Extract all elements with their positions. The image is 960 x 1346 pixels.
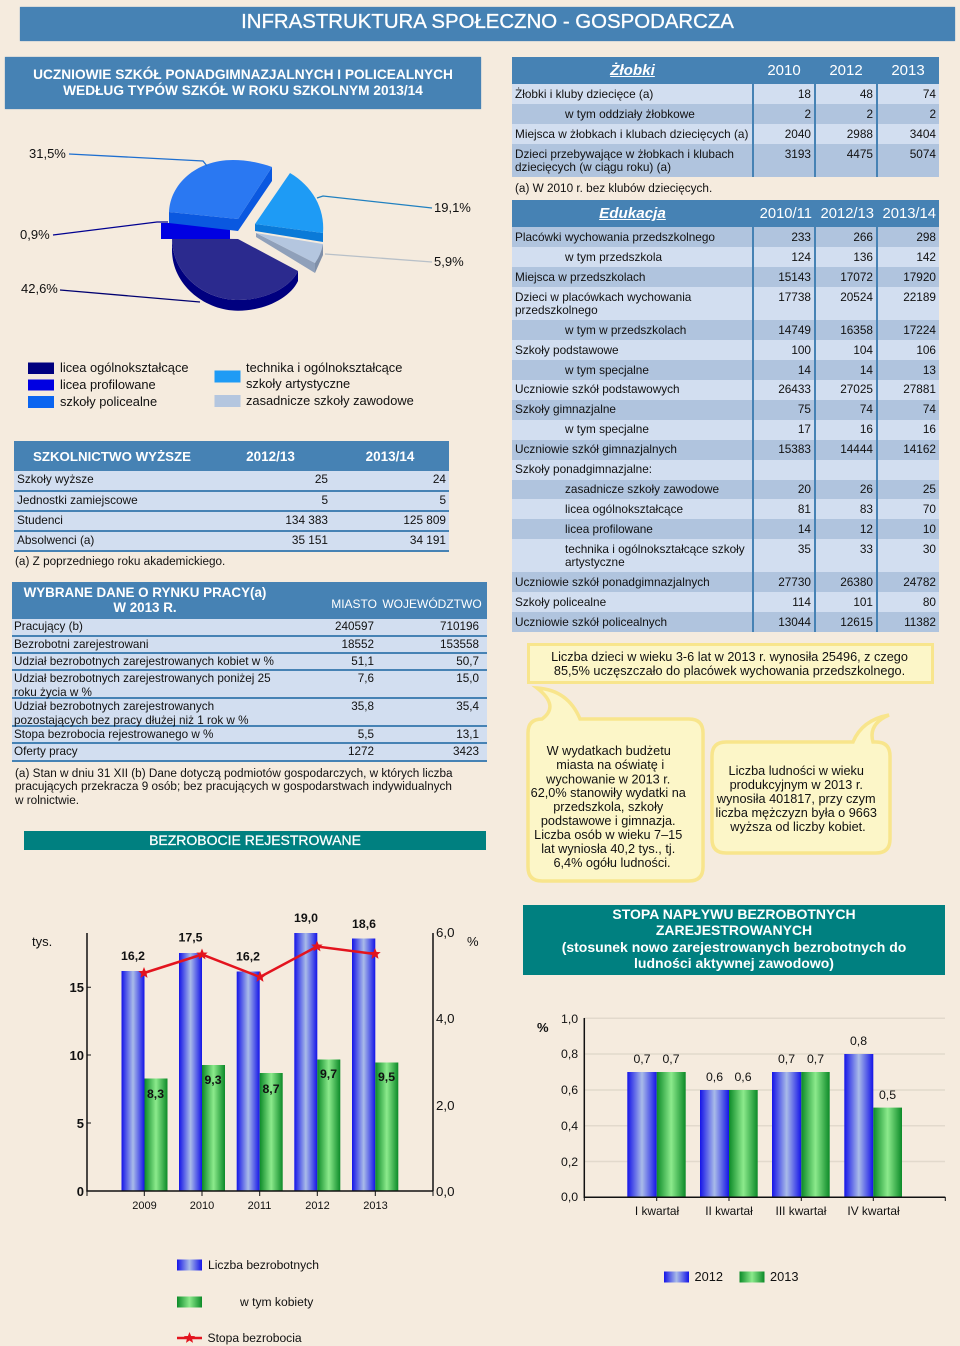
data labels: 17,5 (179, 930, 203, 944)
table: edukacja: 14749 (778, 322, 811, 336)
table: żłobki: 3404 (910, 126, 936, 140)
table: rynek pracy: 3423 (453, 745, 479, 758)
callout: liczba ludności (710, 713, 892, 855)
table: edukacja: 104 (853, 342, 873, 356)
left axis labels: 0 (77, 1184, 84, 1199)
table: szkolnictwo wyższe: Absolwenci (a) (17, 533, 94, 547)
data labels: 9,7 (320, 1067, 337, 1081)
category labels: II kwartał (705, 1204, 753, 1218)
table: żłobki: 5074 (910, 146, 936, 160)
data labels: 0,6 (706, 1070, 723, 1084)
table: edukacja: zasadnicze szkoły zawodowe (565, 482, 719, 496)
data labels: 9,3 (204, 1073, 222, 1087)
title banner: INFRASTRUKTURA SPOŁECZNO - GOSPODARCZA (241, 11, 734, 33)
table: edukacja: 10 (923, 522, 936, 536)
heading: stopa napływu bezrobotnych: ludności aktywnej zawodowo) (634, 955, 834, 971)
table: edukacja: 2012/13 (820, 206, 874, 222)
table: rynek pracy: 7,6 (358, 672, 374, 685)
callout text: wydatki budżetu: 62,0% stanowiły wydatki na (531, 786, 687, 800)
bar chart: stopa napływu bezrobotnych (537, 1012, 946, 1284)
table: edukacja: w tym specjalne (565, 362, 649, 376)
table: żłobki: Żłobki i kluby dziecięce (a) (515, 86, 653, 100)
pie value labels: 5,9% (434, 254, 464, 269)
bars: w tym kobiety (144, 1060, 398, 1191)
table: edukacja: 17920 (903, 270, 936, 284)
table: szkolnictwo wyższe: SZKOLNICTWO WYŻSZE (33, 448, 191, 464)
heading: students by school type (5, 57, 481, 109)
callout text: wydatki budżetu: W wydatkach budżetu (547, 744, 671, 758)
table: edukacja: 22189 (903, 290, 936, 304)
pie value labels: 19,1% (434, 200, 471, 215)
table: rynek pracy: 18552 (341, 638, 374, 651)
legend: bezrobocie: Liczba bezrobotnych (208, 1258, 319, 1272)
table: szkolnictwo wyższe: 125 809 (403, 513, 446, 527)
note: rynek pracy (15, 767, 453, 807)
year labels (132, 1200, 388, 1212)
table: rynek pracy: 710196 (440, 620, 479, 633)
table: rynek pracy: 13,1 (456, 728, 479, 741)
line: stopa bezrobocia (138, 940, 381, 982)
table: edukacja: 17738 (778, 290, 811, 304)
table: edukacja: Szkoły policealne (515, 595, 606, 609)
table: rynek pracy (12, 582, 487, 762)
table: edukacja: technika i ogólnokształcące szkoły artystyczne (565, 542, 745, 569)
table: żłobki: 2040 (785, 126, 811, 140)
y axis labels (561, 1012, 578, 1204)
callout text: wydatki budżetu: podstawowe i gimnazja. (541, 814, 676, 828)
table: edukacja: 16358 (840, 322, 873, 336)
table: edukacja: 27025 (840, 382, 873, 396)
y axis unit: % (537, 1020, 549, 1035)
slice: technika i ogólnokształcące szkoły artystyczne 19,1% (255, 173, 323, 242)
table: edukacja: 12615 (840, 615, 873, 629)
callout text: wydatki budżetu: przedszkola, szkoły (553, 800, 664, 814)
slice: szkoły policealne 31,5% (169, 160, 272, 231)
heading: stopa napływu bezrobotnych (523, 905, 945, 975)
data labels: 0,6 (734, 1070, 752, 1084)
data labels: 0,7 (633, 1052, 651, 1066)
data labels: 19,0 (294, 911, 318, 925)
table: edukacja: 74 (860, 402, 873, 416)
table: edukacja: Uczniowie szkół ponadgimnazjalnych (515, 575, 710, 589)
callout text: wydatki budżetu: lat wyniosła 40,2 tys., tj. (541, 842, 675, 856)
table: szkolnictwo wyższe: Szkoły wyższe (17, 472, 94, 486)
table: edukacja: licea ogólnokształcące (565, 502, 683, 516)
table: rynek pracy: roku życia w % (14, 686, 92, 699)
table: edukacja: 2013/14 (882, 206, 936, 222)
table: edukacja: Uczniowie szkół podstawowych (515, 382, 680, 396)
data labels: 9,5 (378, 1070, 395, 1084)
heading: stopa napływu bezrobotnych: (stosunek nowo zarejestrowanych bezrobotnych do (562, 939, 906, 955)
table: żłobki: 2010 (767, 62, 801, 79)
table: edukacja: 16 (860, 422, 873, 436)
year labels: 2009 (132, 1200, 157, 1212)
table: edukacja: 114 (792, 595, 811, 609)
left axis labels: 10 (70, 1048, 84, 1063)
table: edukacja: 17072 (840, 270, 873, 284)
table: edukacja: 14 (860, 362, 873, 376)
heading: students by school type: WEDŁUG TYPÓW SZKÓŁ W ROKU SZKOLNYM 2013/14 (63, 83, 423, 98)
table: edukacja: 11382 (904, 615, 936, 629)
right axis labels: 2,0 (436, 1098, 454, 1113)
legend: kwartały: 2012 (694, 1269, 723, 1284)
y axis labels: 0,2 (561, 1155, 578, 1169)
table: żłobki: 2 (804, 106, 811, 120)
table: szkolnictwo wyższe: 25 (315, 472, 328, 486)
table: szkolnictwo wyższe: 35 151 (292, 533, 328, 547)
table: edukacja: 81 (798, 502, 811, 516)
table: rynek pracy: 5,5 (358, 728, 374, 741)
table: rynek pracy: Pracujący (b) (14, 620, 83, 633)
data labels: 8,7 (262, 1082, 280, 1096)
table: żłobki: 2013 (891, 62, 925, 79)
table: edukacja: 142 (916, 250, 936, 264)
table: rynek pracy: 51,1 (351, 655, 374, 668)
heading: stopa napływu bezrobotnych: ZAREJESTROWANYCH (656, 922, 812, 938)
table: edukacja: 17 (798, 422, 811, 436)
category labels (635, 1204, 900, 1218)
table: edukacja: 80 (923, 595, 936, 609)
callout text: liczba ludności: produkcyjnym w 2013 r. (730, 778, 863, 792)
data labels: 0,8 (850, 1034, 867, 1048)
callout text: liczba ludności: Liczba ludności w wieku (729, 764, 864, 778)
year labels: 2013 (363, 1200, 388, 1212)
table: szkolnictwo wyższe: 2013/14 (366, 448, 414, 464)
table: rynek pracy: Oferty pracy (14, 745, 78, 758)
year labels: 2012 (305, 1200, 330, 1212)
table: żłobki (512, 57, 939, 177)
table: rynek pracy: 15,0 (456, 672, 479, 685)
category labels: I kwartał (635, 1204, 679, 1218)
table: rynek pracy: Stopa bezrobocia rejestrowanego w % (14, 728, 213, 741)
pie value labels: 31,5% (29, 146, 66, 161)
pie legend: technika i ogólnokształcące (246, 360, 402, 375)
axis unit labels: tys. (32, 934, 52, 949)
table: edukacja: 33 (860, 542, 873, 556)
y axis labels: 0,4 (561, 1119, 578, 1133)
table: edukacja: Szkoły gimnazjalne (515, 402, 616, 416)
table: rynek pracy: Bezrobotni zarejestrowani (14, 638, 148, 651)
y axis labels: 0,8 (561, 1047, 578, 1061)
legend: bezrobocie (177, 1258, 319, 1345)
left axis labels: 15 (70, 980, 84, 995)
slice: zasadnicze szkoły zawodowe 5,9% (256, 233, 323, 273)
note: szkolnictwo wyższe: (a) Z poprzedniego roku akademickiego. (15, 555, 225, 568)
right axis labels (436, 925, 454, 1199)
table: edukacja: Dzieci w placówkach wychowania przedszkolnego (515, 290, 691, 317)
table: edukacja: 17224 (903, 322, 936, 336)
table: edukacja: 266 (853, 230, 873, 244)
table: edukacja: Uczniowie szkół policealnych (515, 615, 667, 629)
table: edukacja: 100 (791, 342, 811, 356)
axes (87, 933, 433, 1196)
table: żłobki: w tym oddziały żłobkowe (565, 106, 695, 120)
y axis labels: 0,0 (561, 1190, 578, 1204)
pie legend: licea ogólnokształcące (60, 360, 189, 375)
table: edukacja: Edukacja (599, 205, 666, 222)
table: żłobki: 4475 (847, 146, 873, 160)
table: żłobki: 3193 (785, 146, 811, 160)
legend: kwartały (664, 1269, 798, 1284)
table: rynek pracy: pozostających bez pracy dłużej niż 1 rok w % (14, 714, 249, 727)
heading: bezrobocie rejestrowane (24, 831, 486, 850)
table: edukacja: 136 (853, 250, 873, 264)
pie legend: zasadnicze szkoły zawodowe (246, 393, 414, 408)
bars: liczba bezrobotnych (122, 933, 375, 1191)
pie value labels: 42,6% (21, 281, 58, 296)
y axis labels: 1,0 (561, 1012, 578, 1026)
table: edukacja: 12 (860, 522, 873, 536)
table: szkolnictwo wyższe: 34 191 (410, 533, 446, 547)
data labels: 16,2 (121, 949, 145, 963)
table: edukacja: w tym specjalne (565, 422, 649, 436)
pie legend: licea profilowane (60, 377, 156, 392)
legend: bezrobocie: Stopa bezrobocia (208, 1331, 302, 1345)
callout: liczba dzieci (527, 643, 934, 684)
table: żłobki: 2 (866, 106, 873, 120)
table: edukacja: 16 (923, 422, 936, 436)
table: rynek pracy: 35,8 (351, 700, 374, 713)
table: rynek pracy: Udział bezrobotnych zarejestrowanych poniżej 25 (14, 672, 271, 685)
table: szkolnictwo wyższe: Studenci (17, 513, 63, 527)
pie chart: students by school type (20, 146, 471, 409)
table: rynek pracy: 1272 (348, 745, 374, 758)
callout text: wydatki budżetu: miasta na oświatę i (556, 758, 664, 772)
table: edukacja (512, 200, 939, 632)
data labels: 8,3 (147, 1087, 164, 1101)
table: edukacja: 15383 (778, 442, 811, 456)
left axis labels: 5 (77, 1116, 84, 1131)
category labels: IV kwartał (847, 1204, 900, 1218)
title banner (20, 7, 955, 41)
callout text: wydatki budżetu: wychowanie w 2013 r. (545, 772, 670, 786)
table: szkolnictwo wyższe: 5 (439, 493, 446, 507)
table: żłobki: 2 (929, 106, 936, 120)
pie legend: szkoły artystyczne (246, 376, 350, 391)
table: szkolnictwo wyższe: Jednostki zamiejscowe (17, 493, 138, 507)
heading: stopa napływu bezrobotnych: STOPA NAPŁYWU BEZROBOTNYCH (612, 906, 856, 922)
table: szkolnictwo wyższe: 24 (433, 472, 446, 486)
data labels: 0,5 (879, 1088, 896, 1102)
callout text: liczba ludności: wyższa od liczby kobiet. (729, 820, 866, 834)
callout text: liczba ludności: wynosiła 401817, przy czym (716, 792, 876, 806)
table: szkolnictwo wyższe: 134 383 (285, 513, 328, 527)
table: edukacja: 35 (798, 542, 811, 556)
data labels: 0,7 (778, 1052, 795, 1066)
table: edukacja: 25 (923, 482, 936, 496)
heading: bezrobocie rejestrowane: BEZROBOCIE REJESTROWANE (149, 832, 361, 848)
table: edukacja: 13 (923, 362, 936, 376)
table: edukacja: 124 (791, 250, 811, 264)
legend: kwartały: 2013 (770, 1269, 798, 1284)
table: edukacja: 26433 (778, 382, 811, 396)
table: rynek pracy: WOJEWÓDZTWO (382, 596, 482, 610)
table: edukacja: 20524 (840, 290, 873, 304)
note: rynek pracy: (a) Stan w dniu 31 XII (b) Dane dotyczą podmiotów gospodarczych, w których liczba pracujących przekracza 9 osób; bez pracujących w gospodarstwach indywidualnych (15, 767, 453, 793)
table: rynek pracy: 35,4 (456, 700, 479, 713)
data labels: 0,7 (807, 1052, 824, 1066)
table: żłobki: 2012 (829, 62, 863, 79)
table: edukacja: w tym przedszkola (565, 250, 662, 264)
table: rynek pracy: 50,7 (456, 655, 479, 668)
table: edukacja: Placówki wychowania przedszkolnego (515, 230, 715, 244)
table: edukacja: 14 (798, 522, 811, 536)
table: edukacja: Szkoły ponadgimnazjalne: (515, 462, 652, 476)
table: żłobki: Dzieci przebywające w żłobkach i klubach dziecięcych (w ciągu roku) (a) (515, 146, 734, 174)
table: żłobki: 48 (860, 86, 873, 100)
table: edukacja: 298 (916, 230, 936, 244)
bar chart: bezrobocie rejestrowane (32, 911, 479, 1345)
table: edukacja: 20 (798, 482, 811, 496)
table: żłobki: Miejsca w żłobkach i klubach dziecięcych (a) (515, 126, 748, 140)
table: rynek pracy: WYBRANE DANE O RYNKU PRACY(a) (24, 585, 266, 600)
note: żłobki: (a) W 2010 r. bez klubów dziecięcych. (515, 182, 712, 195)
table: edukacja: 75 (798, 402, 811, 416)
legend: bezrobocie: w tym kobiety (239, 1295, 314, 1309)
table: edukacja: 30 (923, 542, 936, 556)
pie leader lines (53, 154, 432, 302)
table: edukacja: 101 (853, 595, 873, 609)
data labels (633, 1034, 896, 1102)
callout text: wydatki budżetu: 6,4% ogółu ludności. (553, 856, 671, 870)
table: rynek pracy: Udział bezrobotnych zarejestrowanych kobiet w % (14, 655, 274, 668)
bars: 2012 (627, 1054, 873, 1197)
left axis labels (70, 980, 84, 1199)
table: edukacja: 13044 (778, 615, 811, 629)
table: żłobki: Żłobki (610, 62, 655, 79)
table: szkolnictwo wyższe (14, 441, 449, 552)
axes (584, 1018, 945, 1201)
data labels: 16,2 (236, 950, 260, 964)
table: edukacja: 24782 (903, 575, 936, 589)
table: rynek pracy: MIASTO (331, 596, 377, 610)
pie value labels (20, 146, 471, 296)
table: edukacja: 14162 (903, 442, 936, 456)
year labels: 2010 (190, 1200, 214, 1212)
bars: 2013 (657, 1072, 902, 1197)
table: rynek pracy: 240597 (335, 620, 374, 633)
table: edukacja: Miejsca w przedszkolach (515, 270, 645, 284)
table: edukacja: 26 (860, 482, 873, 496)
right axis labels: 0,0 (436, 1184, 454, 1199)
year labels: 2011 (248, 1200, 271, 1212)
y axis labels: 0,6 (561, 1083, 578, 1097)
note: rynek pracy: w rolnictwie. (15, 794, 79, 807)
right axis labels: 6,0 (436, 925, 454, 940)
table: edukacja: Szkoły podstawowe (515, 342, 619, 356)
table: rynek pracy: Udział bezrobotnych zarejestrowanych (14, 700, 214, 713)
table: edukacja: 83 (860, 502, 873, 516)
table: rynek pracy: W 2013 R. (113, 600, 177, 615)
callout: liczba dzieci: Liczba dzieci w wieku 3-6 lat w 2013 r. wynosiła 25496, z czego (551, 650, 908, 664)
table: edukacja: 74 (923, 402, 936, 416)
table: edukacja: 15143 (778, 270, 811, 284)
table: edukacja: w tym w przedszkolach (565, 322, 686, 336)
table: szkolnictwo wyższe: 5 (321, 493, 328, 507)
pie legend: szkoły policealne (60, 394, 157, 409)
slice: licea profilowane 0,9% (161, 223, 230, 239)
table: edukacja: 27730 (778, 575, 811, 589)
table: edukacja: 27881 (903, 382, 936, 396)
data labels (121, 911, 395, 1101)
callout: wydatki budżetu (526, 686, 705, 883)
axis unit labels: % (467, 934, 479, 949)
data labels: 18,6 (352, 917, 376, 931)
callout: liczba dzieci: 85,5% uczęszczało do placówek wychowania przedszkolnego. (554, 664, 905, 678)
table: edukacja: licea profilowane (565, 522, 653, 536)
table: edukacja: 14 (798, 362, 811, 376)
table: edukacja: 2010/11 (760, 206, 812, 222)
table: edukacja: 14444 (840, 442, 873, 456)
data labels: 0,7 (662, 1052, 680, 1066)
table: edukacja: 233 (791, 230, 811, 244)
table: żłobki: 2988 (847, 126, 873, 140)
table: edukacja: 70 (923, 502, 936, 516)
pie legend (28, 360, 414, 409)
right axis labels: 4,0 (436, 1011, 454, 1026)
callout text: wydatki budżetu: Liczba osób w wieku 7–15 (534, 828, 682, 842)
axis unit labels (32, 934, 479, 949)
heading: students by school type: UCZNIOWIE SZKÓŁ PONADGIMNAZJALNYCH I POLICEALNYCH (33, 66, 453, 82)
table: edukacja: 106 (916, 342, 936, 356)
table: edukacja: Uczniowie szkół gimnazjalnych (515, 442, 677, 456)
table: żłobki: 18 (798, 86, 811, 100)
table: żłobki: 74 (923, 86, 936, 100)
table: rynek pracy: 153558 (440, 638, 479, 651)
table: szkolnictwo wyższe: 2012/13 (246, 448, 295, 464)
callout text: liczba ludności: liczba mężczyzn była o 9663 (715, 806, 877, 820)
table: edukacja: 26380 (840, 575, 873, 589)
category labels: III kwartał (776, 1204, 827, 1218)
slice: licea ogólnokształcące 42,6% (172, 238, 298, 311)
pie value labels: 0,9% (20, 227, 50, 242)
